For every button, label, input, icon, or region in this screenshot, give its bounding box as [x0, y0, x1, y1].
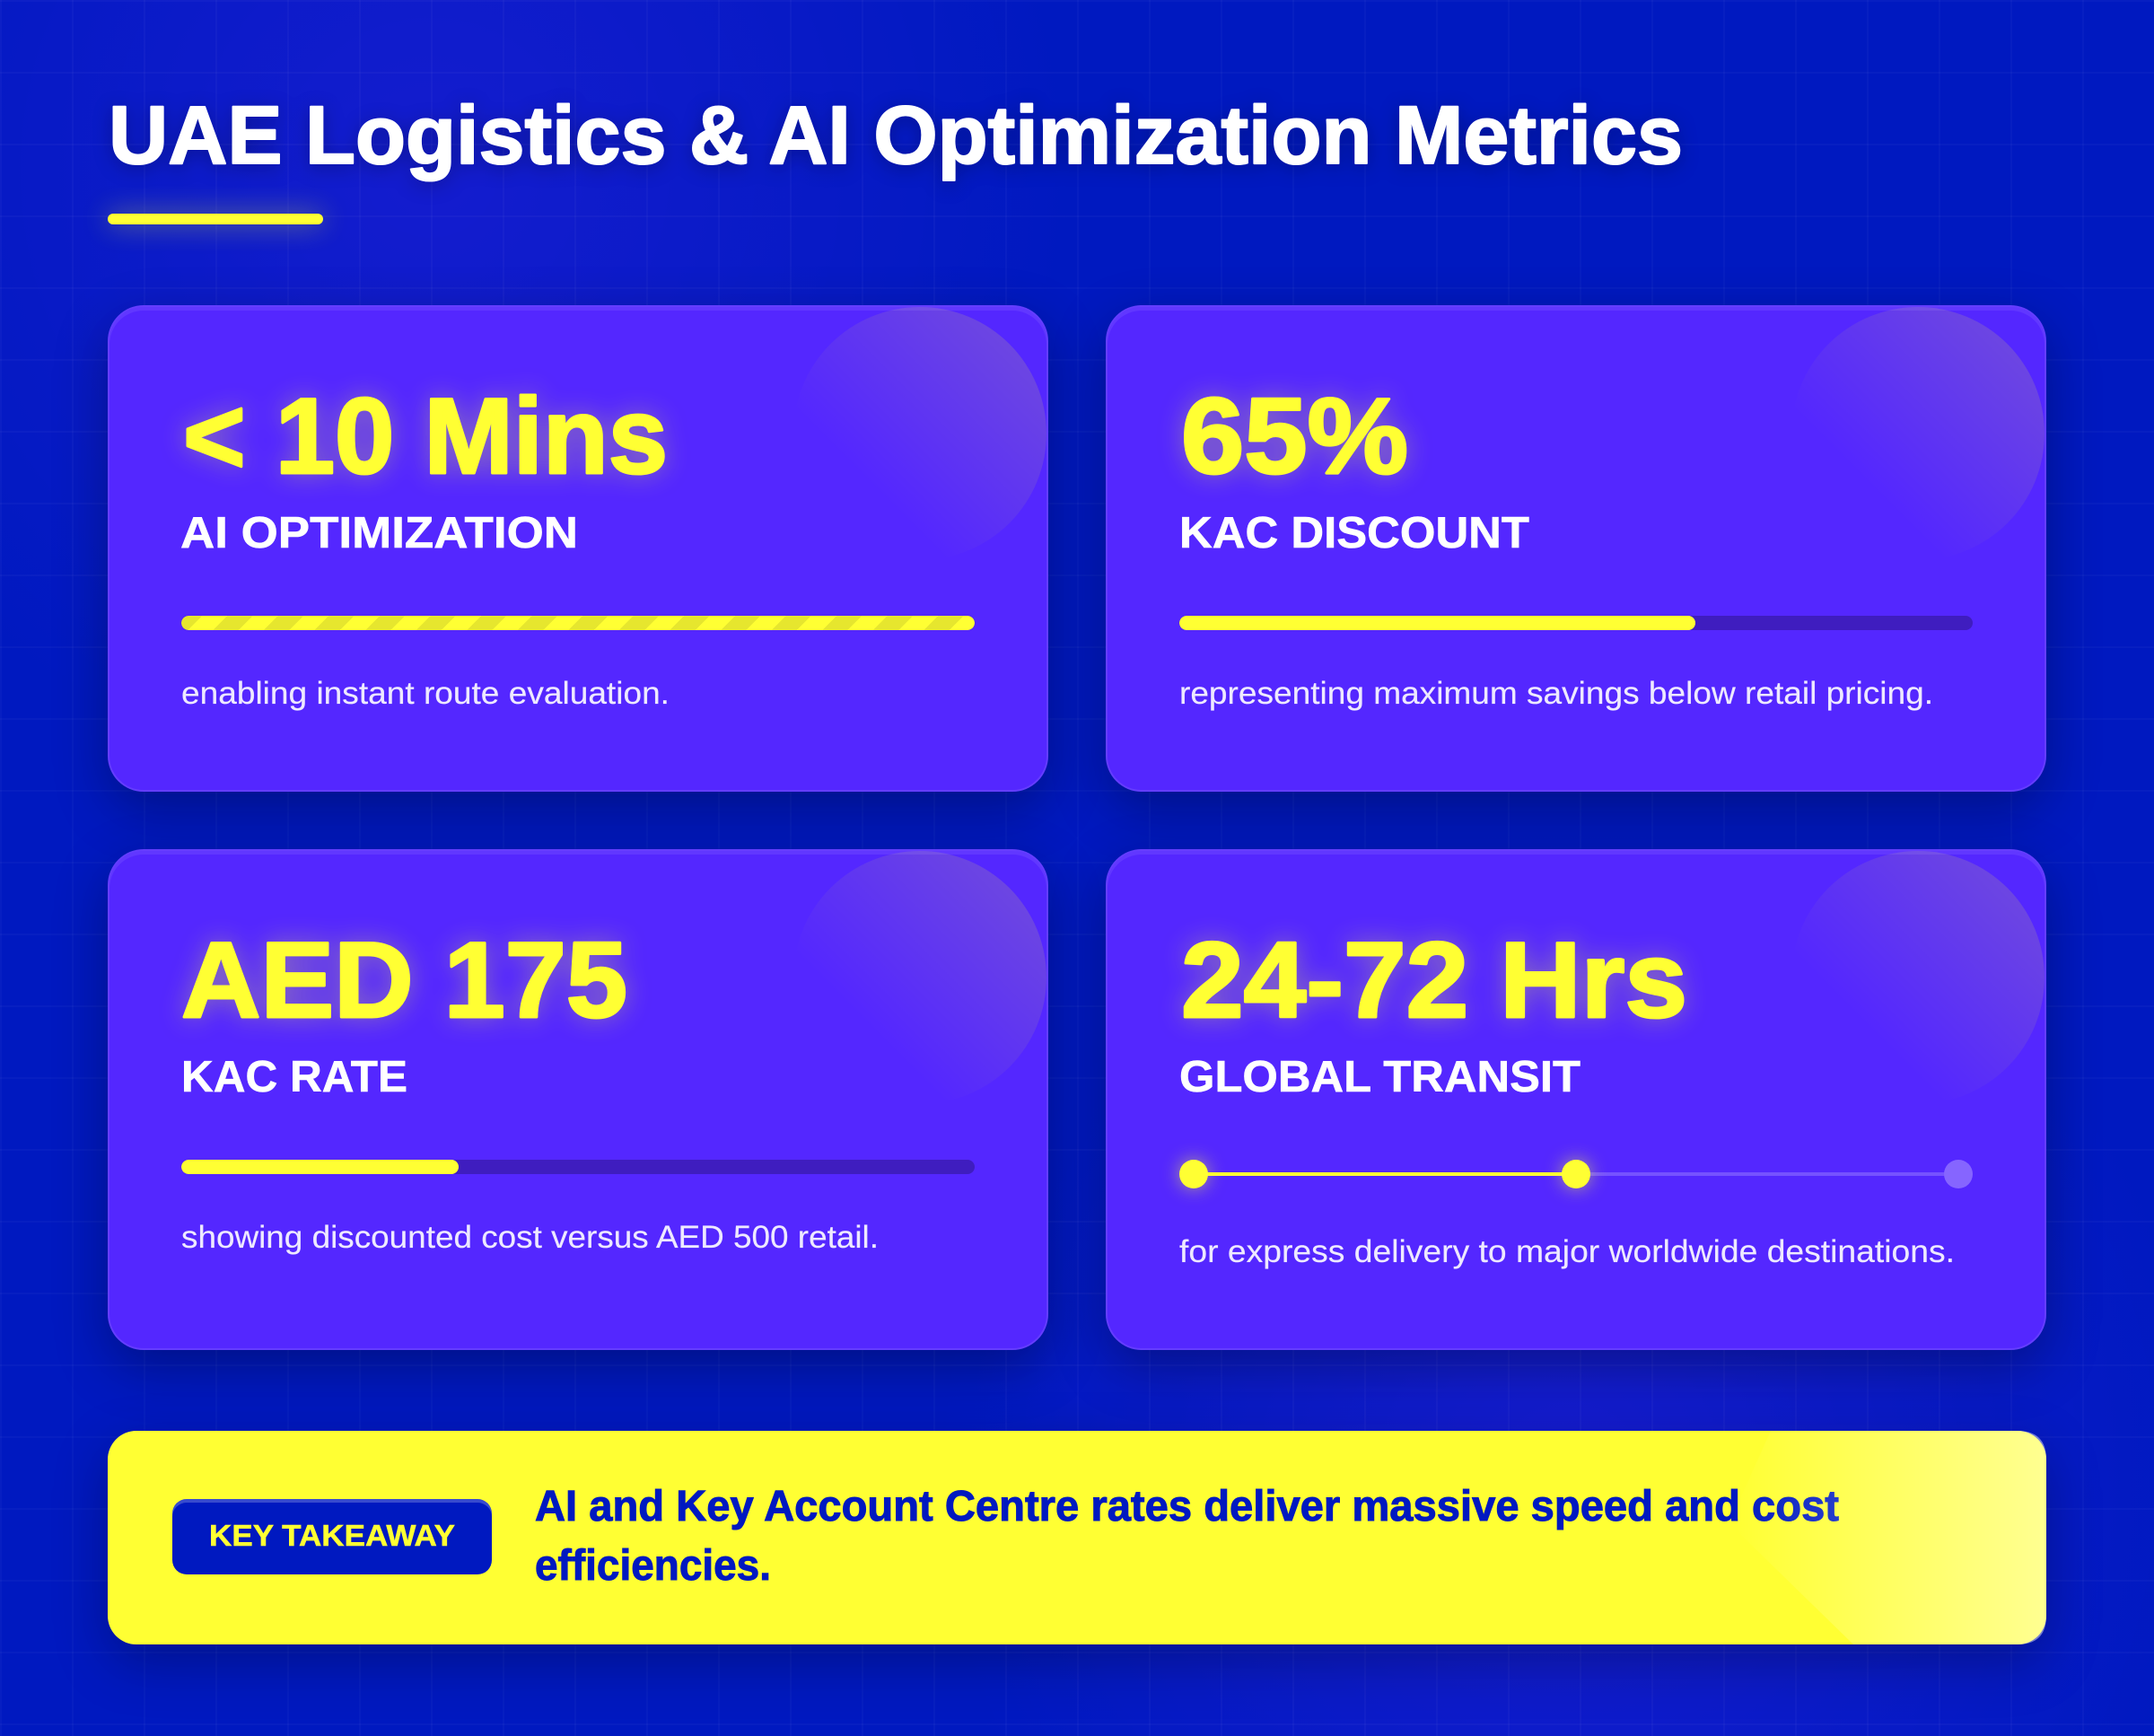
metric text: under 10 minutes: < 10 Mins	[183, 376, 668, 496]
description: representing maximum savings below retail pricing.	[1179, 676, 1933, 711]
takeaway text	[535, 1483, 1839, 1590]
timeline: three stops	[1169, 1149, 1973, 1199]
metric text: 24-72 hours: 24-72 Hrs	[1181, 920, 1687, 1040]
metric text: AED 175: AED 175	[181, 920, 627, 1040]
panel: KAC discount: KAC DISCOUNT	[1179, 509, 1529, 557]
panel: global transit: GLOBAL TRANSIT	[1179, 1053, 1580, 1101]
badge: KEY TAKEAWAY	[209, 1519, 455, 1552]
metric text: under 10 minutes	[176, 376, 675, 557]
description: showing discounted cost versus AED 500 retail.	[181, 1220, 879, 1255]
title underline accent	[108, 214, 323, 224]
metric text: AED 175	[175, 920, 637, 1101]
description: enabling instant route evaluation.	[181, 676, 670, 711]
description: for express delivery to major worldwide destinations.	[1179, 1234, 1955, 1269]
panel: KAC discount	[1106, 305, 2046, 792]
takeaway text: efficiencies.	[535, 1542, 771, 1590]
banner: key takeaway	[108, 1431, 2046, 1644]
panel: AI optimization	[108, 305, 1048, 792]
metric text: 24-72 hours	[1174, 920, 1694, 1101]
decorative highlight	[1756, 1431, 2046, 1644]
metric text: 65%: 65%	[1181, 376, 1408, 496]
progress bar: 65 percent	[1179, 616, 1973, 630]
panel: KAC rate: KAC RATE	[181, 1053, 407, 1101]
progress bar: 35 percent	[181, 1160, 975, 1174]
panel: KAC rate	[108, 849, 1048, 1350]
metric text: 65%	[1170, 376, 1529, 557]
progress bar: full striped	[181, 616, 975, 630]
panel: AI optimization: AI OPTIMIZATION	[180, 509, 578, 557]
takeaway text: AI and Key Account Centre rates deliver massive speed and cost	[535, 1483, 1839, 1530]
panel: global transit	[1106, 849, 2046, 1350]
badge	[172, 1499, 492, 1574]
title: UAE Logistics & AI Optimization Metrics	[109, 90, 1683, 181]
